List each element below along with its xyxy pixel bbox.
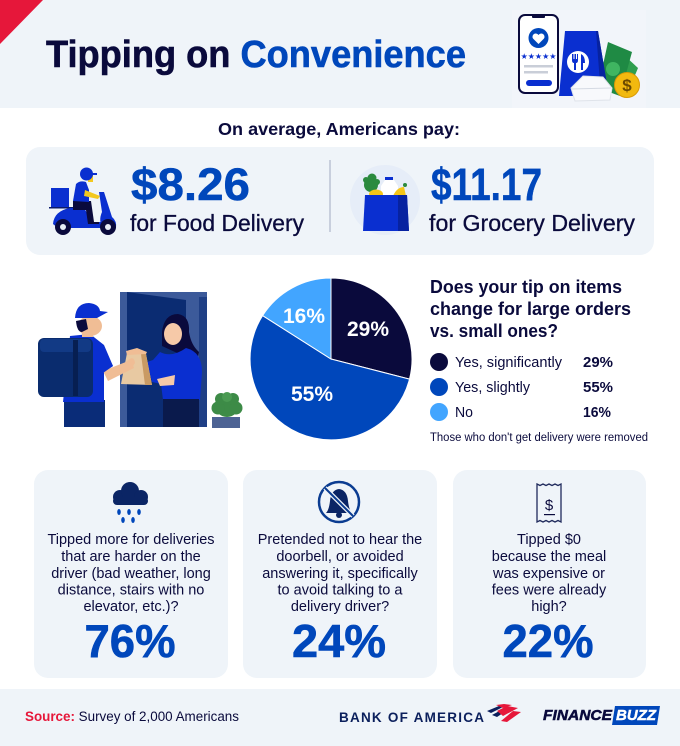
panel: tipped zero dollars <box>453 470 646 678</box>
card text <box>258 532 422 615</box>
card text: high? <box>531 599 567 615</box>
card text: Pretended not to hear the <box>258 532 422 548</box>
label: 29%: 29% <box>347 318 389 341</box>
logo: Bank of America: BANK OF AMERICA <box>339 710 484 725</box>
legend row: yes, significantly: 29% <box>583 354 613 371</box>
legend row: no: 16% <box>583 404 611 421</box>
icon: phone, delivery bag, cash and coin <box>512 10 646 108</box>
grocery delivery price: $11.17 <box>431 159 542 210</box>
slice: no 16% <box>263 278 331 359</box>
slice: yes, slightly 55% <box>250 316 410 440</box>
chart question heading: change for large orders <box>430 298 631 319</box>
legend row: yes, slightly <box>430 378 613 396</box>
card text: delivery driver? <box>291 599 389 615</box>
label: 16%: 16% <box>283 305 325 328</box>
card text: doorbell, or avoided <box>276 549 404 565</box>
icon: rain cloud <box>113 482 148 523</box>
icon: receipt: $ <box>545 497 554 514</box>
footer <box>0 689 680 746</box>
logo: FinanceBuzz: BUZZ <box>616 707 657 724</box>
logo: FinanceBuzz: FINANCE <box>543 707 613 724</box>
red corner triangle <box>0 0 43 44</box>
card text: driver (bad weather, long <box>51 566 211 582</box>
panel: avoided the doorbell <box>243 470 437 678</box>
slice: yes, significantly 29% <box>331 278 412 379</box>
icon: takeout box <box>571 76 612 101</box>
legend <box>430 353 613 421</box>
woman customer <box>147 314 202 427</box>
legend row: yes, significantly: Yes, significantly <box>455 354 562 371</box>
icon: delivery bag <box>559 31 609 96</box>
panel: average delivery costs <box>26 147 654 255</box>
legend row: no: No <box>455 404 473 421</box>
card text <box>492 532 607 615</box>
logo: FinanceBuzz <box>543 706 660 725</box>
illustration: driver handing bag to customer at door <box>38 292 242 428</box>
card text: Tipped more for deliveries <box>47 532 215 548</box>
food delivery label: for Food Delivery <box>130 210 304 236</box>
card text: because the meal <box>492 549 606 565</box>
grocery delivery label: for Grocery Delivery <box>429 210 636 236</box>
statistic: 76%: 76% <box>84 615 176 667</box>
card text: answering it, specifically <box>262 566 419 582</box>
card text: that are harder on the <box>61 549 201 565</box>
chart footnote: Those who don't get delivery were removed <box>430 432 648 444</box>
card text: to avoid talking to a <box>278 582 403 598</box>
icon: receipt <box>537 484 561 522</box>
subheading: On average, Americans pay: <box>218 119 460 139</box>
legend row: yes, slightly: Yes, slightly <box>455 379 530 396</box>
paper bag <box>121 348 152 385</box>
chart question heading: vs. small ones? <box>430 320 558 341</box>
icon: delivery scooter <box>49 168 116 235</box>
icon: phone: ★★★★★ <box>521 52 556 61</box>
legend row: no <box>430 403 611 421</box>
panel: tipped more for hard deliveries <box>34 470 228 678</box>
food delivery price: $8.26 <box>131 159 250 210</box>
label: 55%: 55% <box>291 383 333 406</box>
chart question heading: Does your tip on items <box>430 276 622 297</box>
icon: cash <box>598 42 638 96</box>
door <box>120 292 207 427</box>
source line: Source: Survey of 2,000 Americans <box>25 709 239 724</box>
legend row: yes, significantly <box>430 353 613 371</box>
statistic: 22%: 22% <box>502 615 594 667</box>
statistic: 24%: 24% <box>292 615 386 667</box>
icon: coin: $ <box>622 76 632 95</box>
header band <box>0 0 680 108</box>
legend row: yes, slightly: 55% <box>583 379 613 396</box>
card text: fees were already <box>492 582 607 598</box>
card text: was expensive or <box>492 566 605 582</box>
card text: Tipped $0 <box>517 532 581 548</box>
icon: grocery bag <box>350 165 420 235</box>
potted plant <box>212 392 242 428</box>
delivery driver <box>38 303 135 427</box>
chart question heading <box>430 276 631 341</box>
card text: distance, stairs with no <box>58 582 204 598</box>
pie chart <box>250 278 412 440</box>
logo: Bank of America <box>339 704 521 725</box>
card text <box>47 532 215 615</box>
title: Tipping on Convenience <box>46 34 466 76</box>
card text: elevator, etc.)? <box>83 599 179 615</box>
icon: crossed-out bell <box>319 482 359 522</box>
